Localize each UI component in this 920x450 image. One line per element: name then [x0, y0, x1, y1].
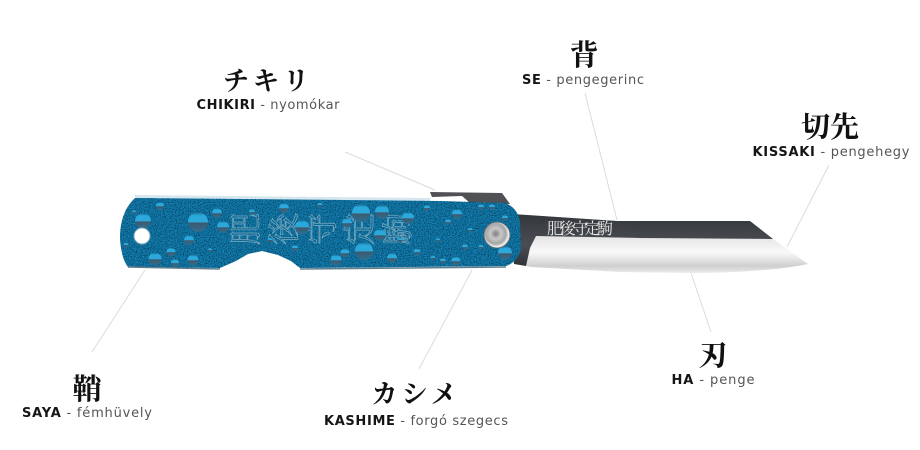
blade spine dark band: [512, 214, 773, 266]
label: ha: 刃: [698, 340, 728, 372]
blade stamp: 肥後守定駒: [547, 220, 613, 238]
label: se: [522, 39, 644, 88]
handle edge highlight: [135, 195, 430, 202]
engraved characters: 肥後守定駒: [228, 212, 416, 246]
label: saya: 鞘: [72, 373, 103, 406]
label: saya: [22, 373, 152, 421]
chikiri lever: [430, 192, 510, 204]
label: kashime: KASHIME - forgó szegecs: [324, 414, 508, 429]
saya handle: [120, 198, 521, 269]
label: kashime: カシメ: [371, 380, 461, 409]
label: saya: SAYA - fémhüvely: [22, 406, 152, 421]
label: chikiri: チキリ: [223, 67, 313, 96]
label: kashime: [324, 380, 508, 429]
blade: [512, 214, 808, 273]
label: se: SE - pengegerinc: [522, 73, 644, 88]
label: chikiri: [196, 67, 340, 113]
label: kissaki: [752, 111, 910, 160]
label: ha: HA - penge: [672, 373, 754, 388]
rivet: [484, 222, 510, 248]
lanyard hole: [134, 228, 150, 244]
knife illustration: [120, 192, 808, 273]
label: kissaki: 切先: [801, 111, 859, 144]
label: chikiri: CHIKIRI - nyomókar: [196, 98, 340, 113]
label: se: 背: [569, 39, 599, 72]
label: ha: [672, 340, 754, 388]
label: kissaki: KISSAKI - pengehegy: [752, 145, 910, 160]
water drops: [124, 202, 512, 267]
leader lines: [92, 93, 829, 369]
